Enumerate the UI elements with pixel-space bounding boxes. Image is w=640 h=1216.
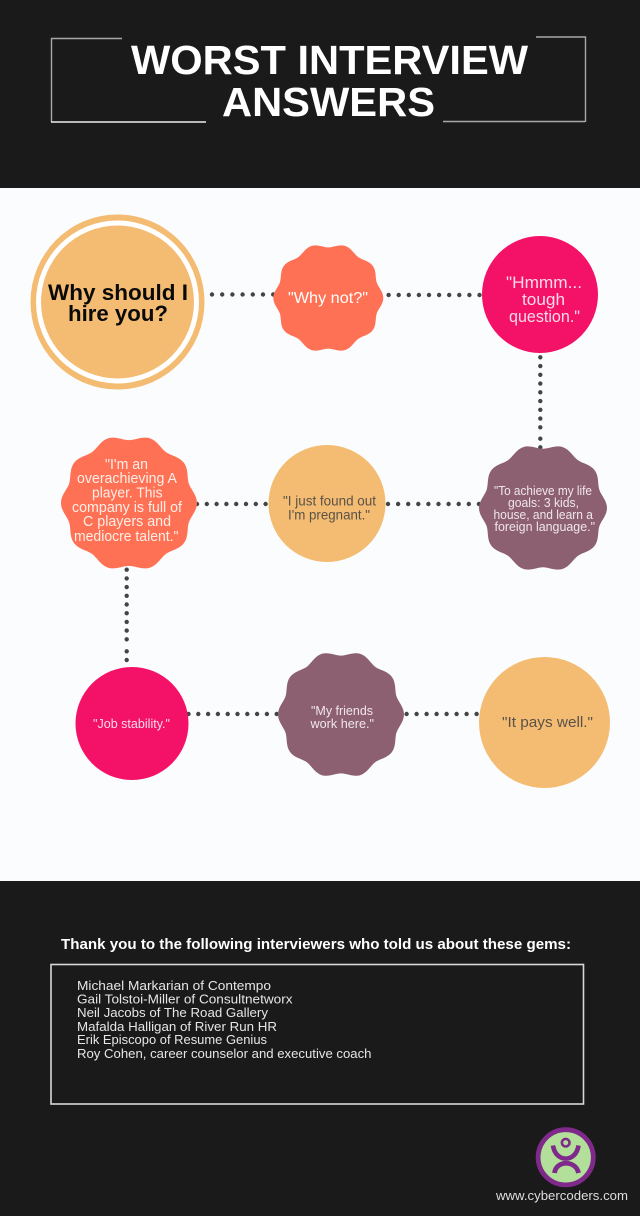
credits list: Erik Episcopo of Resume Genius <box>77 1032 267 1047</box>
question circle: hire you? <box>68 301 168 326</box>
answer: tough question: "Hmmm... <box>506 273 582 292</box>
credits list: Neil Jacobs of The Road Gallery <box>77 1005 268 1020</box>
title <box>131 37 528 125</box>
answer: friends <box>278 653 404 776</box>
answer: pregnant: I'm pregnant." <box>288 506 370 522</box>
title: ANSWERS <box>222 79 435 125</box>
title frame <box>51 37 586 122</box>
credits box <box>51 964 584 1104</box>
answer: job stability: "Job stability." <box>93 717 170 731</box>
answer: friends: work here." <box>309 717 374 731</box>
answer: overachieving: C players and <box>83 514 171 530</box>
answer: life goals: house, and learn a <box>494 508 593 522</box>
answer: pregnant: "I just found out <box>283 492 376 508</box>
answer: overachieving <box>61 438 197 568</box>
answer: pays well <box>479 657 610 788</box>
answer: job stability <box>76 667 188 780</box>
answer: overachieving: company is full of <box>72 500 183 516</box>
answer: why not <box>273 245 383 351</box>
answer: overachieving: "I'm an <box>105 457 148 473</box>
answer: life goals: goals: 3 kids, <box>508 496 579 510</box>
answer: life goals <box>479 446 607 570</box>
panel: answers flow <box>0 188 640 881</box>
panel: footer <box>0 881 640 1216</box>
credits list: Mafalda Halligan of River Run HR <box>77 1019 277 1034</box>
website url: www.cybercoders.com <box>495 1188 628 1203</box>
answer: overachieving: player. This <box>92 486 162 502</box>
answer: tough question: question." <box>509 307 580 326</box>
answer: why not: "Why not?" <box>288 290 368 307</box>
answer: pregnant <box>268 445 386 562</box>
panel: header <box>0 0 640 188</box>
answer: overachieving: mediocre talent." <box>74 529 178 545</box>
answer: tough question: tough <box>522 290 565 309</box>
credits list: Roy Cohen, career counselor and executive coach <box>77 1046 372 1061</box>
question circle: Why should I <box>48 280 188 305</box>
dotted connectors <box>127 294 540 714</box>
answer: tough question <box>482 236 598 353</box>
credits list <box>77 978 372 1061</box>
icon: cybercoders logo <box>538 1130 593 1185</box>
answer: life goals: "To achieve my life <box>494 484 592 498</box>
question circle <box>30 214 204 390</box>
title: WORST INTERVIEW <box>131 37 528 83</box>
answer: overachieving: overachieving A <box>77 471 177 487</box>
credits heading: Thank you to the following interviewers who told us about these gems: <box>61 937 571 953</box>
credits list: Michael Markarian of Contempo <box>77 978 271 993</box>
credits list: Gail Tolstoi-Miller of Consultnetworx <box>77 992 293 1006</box>
answer: life goals: foreign language." <box>494 520 595 534</box>
answer: pays well: "It pays well." <box>502 714 593 731</box>
answer: friends: "My friends <box>311 704 373 718</box>
